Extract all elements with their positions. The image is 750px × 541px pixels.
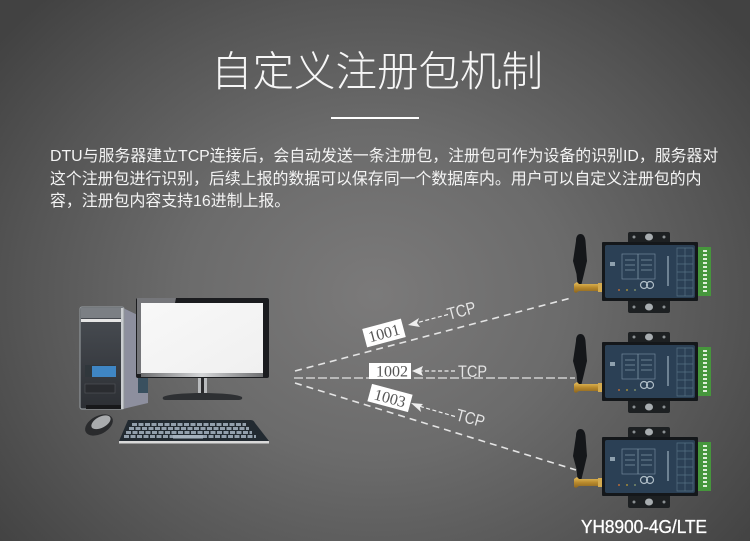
connection: dashed line to device 2 — [294, 377, 575, 379]
label: 1001 tag — [362, 319, 406, 347]
title: 自定义注册包机制 — [211, 48, 543, 95]
device 3 — [573, 427, 711, 508]
intro text block: 容，注册包内容支持16进制上报。 — [50, 193, 290, 210]
label: TCP 2: TCP — [458, 362, 487, 381]
label: 1002 tag: 1002 — [376, 364, 408, 380]
intro text block — [50, 147, 718, 210]
label: TCP 1: TCP — [445, 298, 478, 324]
device 2 — [573, 332, 711, 413]
arrow: TCP to 1001 — [408, 314, 448, 327]
label: 1003 tag — [367, 384, 413, 413]
icon: mouse — [82, 410, 116, 440]
connection: dashed line to device 1 — [295, 298, 571, 371]
product name: YH8900-4G/LTE — [581, 517, 707, 537]
arrow: TCP to 1002 — [412, 366, 455, 376]
icon: monitor — [136, 298, 269, 400]
label: TCP 3: TCP — [454, 406, 487, 431]
arrow: TCP to 1003 — [411, 403, 455, 416]
title underline — [331, 117, 419, 119]
intro text block: DTU与服务器建立TCP连接后，会自动发送一条注册包，注册包可作为设备的识别ID，服务器对 — [50, 148, 718, 165]
icon: computer tower — [80, 307, 148, 409]
label: 1001 tag: 1001 — [367, 322, 402, 346]
intro text block: 这个注册包进行识别，后续上报的数据可以保存同一个数据库内。用户可以自定义注册包的内 — [50, 170, 702, 188]
connection: dashed line to device 3 — [295, 383, 576, 470]
label: 1003 tag: 1003 — [372, 387, 407, 411]
icon: keyboard — [119, 420, 269, 444]
device 1 — [573, 232, 711, 313]
